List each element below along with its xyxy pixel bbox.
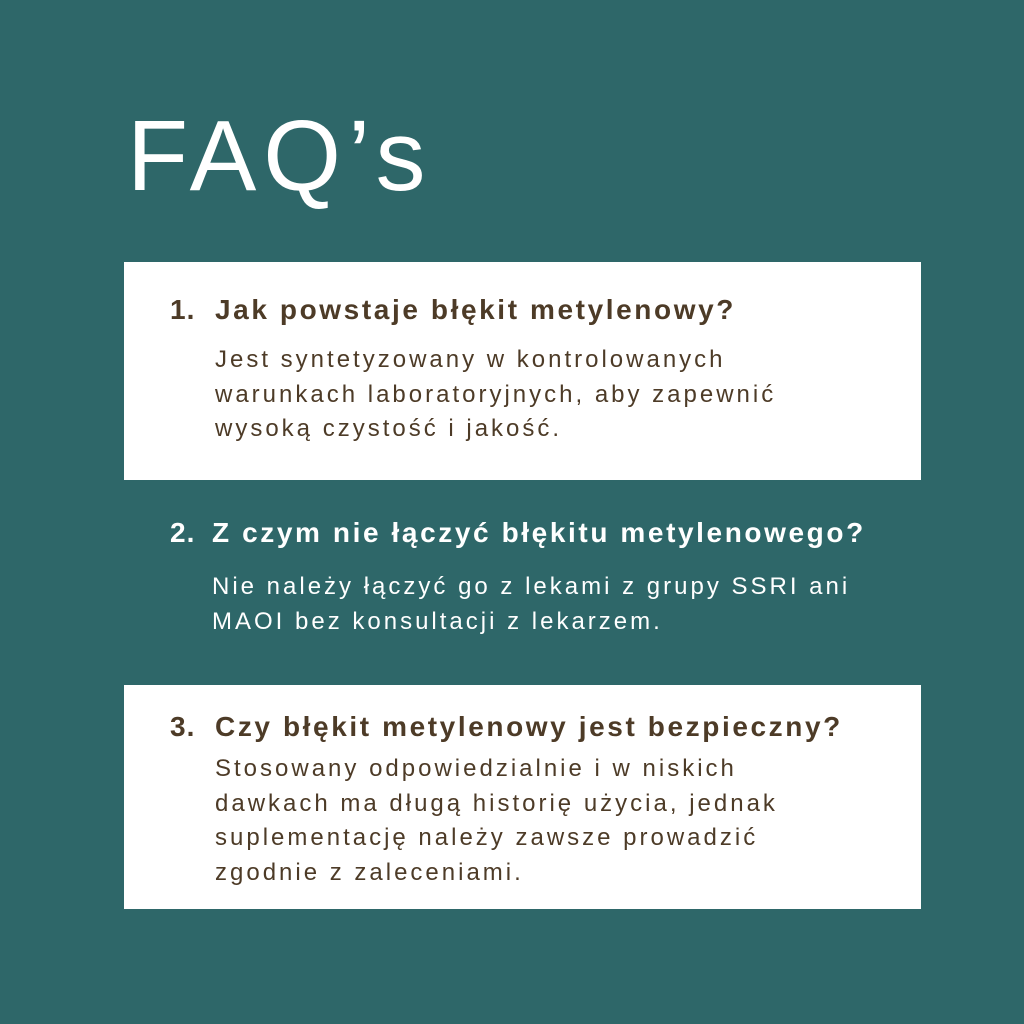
panel: question 3: 3.: [170, 711, 195, 742]
title: FAQ’s: [127, 100, 432, 212]
panel: question 2: [170, 517, 866, 634]
answer 3: dawkach ma długą historię użycia, jednak: [215, 790, 778, 816]
answer 2: MAOI bez konsultacji z lekarzem.: [212, 608, 663, 634]
answer 1: [215, 346, 776, 442]
panel: question 2: Z czym nie łączyć błękitu metylenowego?: [212, 517, 866, 548]
answer 3: suplementację należy zawsze prowadzić: [215, 824, 758, 851]
panel: question 3: Czy błękit metylenowy jest bezpieczny?: [215, 711, 843, 742]
question 1 heading: [170, 294, 736, 325]
panel: question 3: [124, 685, 921, 909]
answer 1: wysoką czystość i jakość.: [215, 415, 562, 442]
question 3 heading: [170, 711, 843, 742]
answer 3: zgodnie z zaleceniami.: [215, 858, 524, 886]
panel: question 1: Jak powstaje błękit metylenowy?: [215, 294, 736, 325]
answer 1: warunkach laboratoryjnych, aby zapewnić: [215, 380, 776, 408]
answer 1: Jest syntetyzowany w kontrolowanych: [215, 346, 726, 373]
panel: question 2: 2.: [170, 517, 195, 548]
answer 3: [215, 755, 778, 886]
answer 2: [212, 573, 850, 634]
answer 2: Nie należy łączyć go z lekami z grupy SSRI ani: [212, 573, 850, 600]
question 2 heading: [170, 517, 866, 548]
answer 3: Stosowany odpowiedzialnie i w niskich: [215, 755, 737, 782]
panel: question 1: 1.: [170, 294, 195, 325]
panel: question 1: [124, 262, 921, 480]
